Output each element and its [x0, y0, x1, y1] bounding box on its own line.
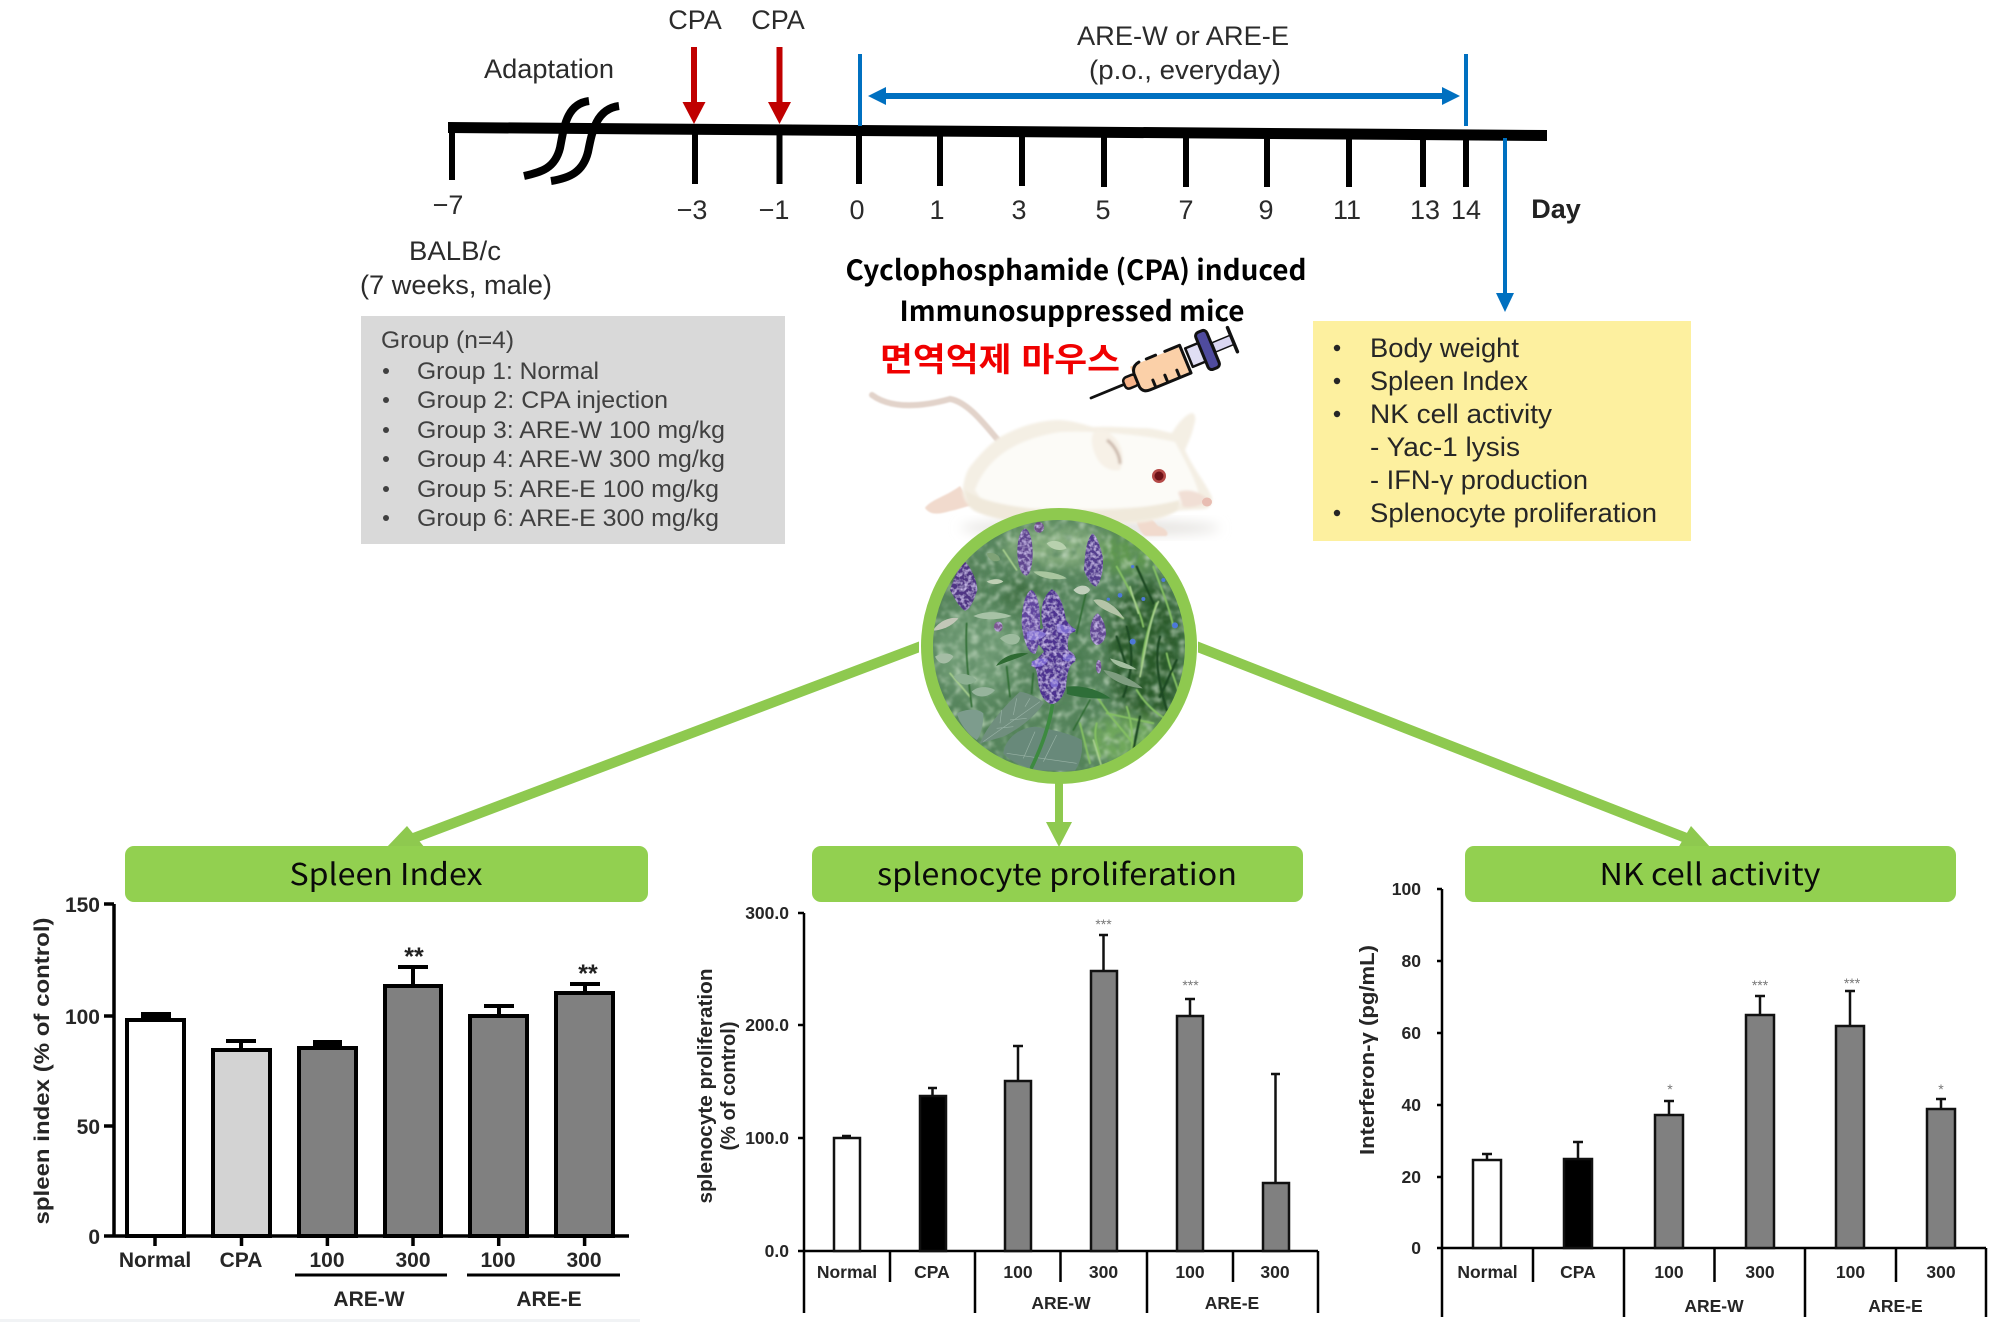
arrow: to NK cell activity — [1198, 642, 1711, 848]
chart: NK cell activity — [1357, 879, 1986, 1317]
bars with error bars — [1473, 991, 1955, 1248]
paws — [925, 486, 1168, 536]
category labels — [1457, 1262, 1956, 1316]
day labels: 7 — [1178, 195, 1194, 225]
model title: Cyclophosphamide (CPA) induced — [846, 249, 1306, 289]
pale leaves — [933, 541, 1143, 696]
significance marks — [1667, 975, 1944, 1097]
panel: groups: Group (n=4) — [381, 327, 514, 354]
y tick labels: 60 — [1402, 1023, 1421, 1043]
y axis title: spleen index (% of control) — [31, 918, 54, 1224]
significance marks: *** — [1844, 975, 1861, 991]
panel: endpoints — [1313, 321, 1691, 541]
CPA label 2: CPA — [751, 5, 805, 35]
header: splenocyte proliferation: splenocyte proliferation — [877, 850, 1237, 894]
y tick labels — [65, 894, 100, 1249]
day labels: −1 — [759, 195, 789, 225]
blue flowers — [1107, 565, 1178, 645]
category labels: 100 — [480, 1249, 516, 1272]
y tick labels: 300.0 — [745, 903, 789, 923]
panel: endpoints: Spleen Index — [1370, 366, 1528, 396]
grass blades — [950, 550, 1180, 767]
y tick labels: 40 — [1402, 1095, 1421, 1115]
category labels: ARE-E — [516, 1288, 582, 1311]
y tick labels: 0.0 — [765, 1241, 789, 1261]
y tick labels: 100 — [1392, 879, 1421, 899]
group underlines — [295, 1274, 620, 1276]
day labels: 9 — [1258, 195, 1274, 225]
category labels: CPA — [1560, 1262, 1596, 1282]
category labels: 100 — [1836, 1262, 1865, 1282]
panel: groups: Group 1: Normal — [417, 358, 599, 385]
header: spleen index — [125, 846, 648, 902]
category labels: 100 — [1654, 1262, 1684, 1282]
header: NK cell activity — [1465, 846, 1956, 902]
ground shadow — [960, 520, 1220, 536]
CPA label 1: CPA — [668, 5, 722, 35]
category labels: ARE-W — [1031, 1293, 1091, 1313]
animal label — [360, 236, 552, 300]
y axis title: (% of control) — [718, 1022, 740, 1150]
arrow: to spleen index — [386, 642, 919, 848]
photo background — [927, 517, 1193, 777]
icon: syringe — [1083, 321, 1240, 416]
treatment label — [1077, 21, 1289, 85]
axis ticks — [452, 128, 1466, 187]
significance marks: ** — [404, 943, 424, 971]
model title — [846, 249, 1306, 330]
animal label: (7 weeks, male) — [360, 270, 552, 300]
y tick labels: 100 — [65, 1006, 100, 1029]
panel: endpoints: - Yac-1 lysis — [1370, 432, 1520, 462]
y tick labels: 100.0 — [745, 1128, 789, 1148]
red arrow: CPA 1 — [682, 47, 706, 124]
illustration: white mouse — [872, 395, 1220, 536]
panel: groups: Group 2: CPA injection — [417, 387, 668, 414]
significance marks: * — [1938, 1081, 1944, 1097]
significance marks: ** — [578, 960, 598, 988]
animal label: BALB/c — [409, 236, 501, 266]
category labels: Normal — [1457, 1262, 1518, 1282]
y tick labels — [745, 903, 789, 1261]
y tick labels: 0 — [1411, 1238, 1421, 1258]
category labels — [119, 1249, 602, 1311]
day labels: 0 — [849, 195, 865, 225]
day labels: Day — [1531, 194, 1581, 224]
axes — [1437, 889, 1986, 1317]
category labels: ARE-W — [333, 1288, 405, 1311]
chart: splenocyte proliferation — [695, 903, 1318, 1313]
y axis title: splenocyte proliferation — [695, 968, 717, 1204]
significance marks: *** — [1095, 916, 1112, 932]
significance marks: *** — [1752, 977, 1769, 993]
y tick labels: 50 — [77, 1116, 100, 1139]
bars with error bars — [834, 935, 1289, 1251]
y tick labels: 20 — [1402, 1167, 1421, 1187]
soft mottling — [936, 528, 1184, 751]
panel: endpoints: - IFN-γ production — [1370, 465, 1588, 495]
panel: groups — [361, 316, 785, 544]
illustration: agastache plant photo in green ring — [927, 514, 1193, 778]
panel: endpoints: Splenocyte proliferation — [1370, 498, 1657, 528]
adaptation label: Adaptation — [484, 54, 614, 84]
category labels: ARE-W — [1684, 1296, 1744, 1316]
panel: groups: Group 5: ARE-E 100 mg/kg — [417, 476, 719, 503]
category labels: 300 — [1926, 1262, 1956, 1282]
body — [962, 413, 1212, 524]
tail — [872, 395, 998, 440]
significance marks — [404, 943, 598, 988]
header: spleen index: Spleen Index — [290, 850, 483, 894]
y tick labels: 200.0 — [745, 1015, 789, 1035]
dark glossy leaves — [996, 653, 1111, 699]
category labels: Normal — [817, 1262, 877, 1282]
blue down arrow — [1496, 138, 1514, 312]
day labels: −7 — [433, 190, 463, 220]
axis break — [524, 101, 619, 181]
eye — [1152, 469, 1166, 483]
panel: endpoints: Body weight — [1370, 333, 1520, 363]
model title: Immunosuppressed mice — [900, 290, 1244, 330]
significance marks: * — [1667, 1081, 1673, 1097]
category labels: 300 — [566, 1249, 602, 1272]
day labels: 3 — [1011, 195, 1027, 225]
y tick labels: 150 — [65, 894, 100, 917]
flower spikes — [950, 522, 1106, 704]
timeline axis — [448, 122, 1547, 141]
category labels: 100 — [309, 1249, 345, 1272]
category labels — [817, 1262, 1290, 1313]
blue treatment bracket — [860, 54, 1466, 126]
y tick labels: 0 — [88, 1226, 100, 1249]
day labels: 1 — [929, 195, 945, 225]
category labels: 300 — [1745, 1262, 1775, 1282]
category labels: Normal — [119, 1249, 191, 1272]
panel: endpoints: NK cell activity — [1370, 399, 1553, 429]
axes — [798, 913, 1318, 1313]
significance marks: *** — [1182, 977, 1199, 993]
category labels: CPA — [220, 1249, 262, 1272]
panel: groups: Group 6: ARE-E 300 mg/kg — [417, 505, 719, 532]
panel: groups: Group 4: ARE-W 300 mg/kg — [417, 446, 725, 473]
arrow: to splenocyte proliferation — [1046, 780, 1072, 847]
day labels: 14 — [1451, 195, 1481, 225]
y axis title: Interferon-γ (pg/mL) — [1357, 945, 1379, 1155]
treatment label: (p.o., everyday) — [1089, 55, 1281, 85]
category labels: 100 — [1003, 1262, 1033, 1282]
y tick labels — [1392, 879, 1421, 1258]
day labels: 11 — [1333, 195, 1361, 225]
panel: groups: Group 3: ARE-W 100 mg/kg — [417, 417, 725, 444]
main stem — [1032, 705, 1052, 767]
korean label: 면역억제 마우스 — [880, 341, 1120, 378]
nose — [1202, 498, 1212, 506]
day labels: 13 — [1410, 195, 1440, 225]
treatment label: ARE-W or ARE-E — [1077, 21, 1289, 51]
category labels: ARE-E — [1868, 1296, 1923, 1316]
y tick labels: 80 — [1402, 951, 1421, 971]
axes — [104, 904, 629, 1246]
day labels: −3 — [677, 195, 707, 225]
veined gray leaves — [957, 692, 1082, 771]
red arrow: CPA 2 — [768, 47, 791, 124]
category labels: 300 — [1260, 1262, 1290, 1282]
day labels: 5 — [1095, 195, 1111, 225]
header: splenocyte proliferation — [812, 846, 1303, 902]
y axis title — [695, 968, 740, 1204]
significance marks — [1095, 916, 1199, 993]
timeline — [433, 5, 1581, 312]
chart: spleen index — [31, 894, 629, 1311]
category labels: ARE-E — [1205, 1293, 1259, 1313]
category labels: 300 — [1089, 1262, 1118, 1282]
category labels: 300 — [395, 1249, 431, 1272]
category labels: CPA — [914, 1262, 950, 1282]
header: NK cell activity: NK cell activity — [1600, 850, 1821, 894]
category labels: 100 — [1175, 1262, 1205, 1282]
bars with error bars — [127, 967, 613, 1236]
day labels — [433, 190, 1581, 225]
